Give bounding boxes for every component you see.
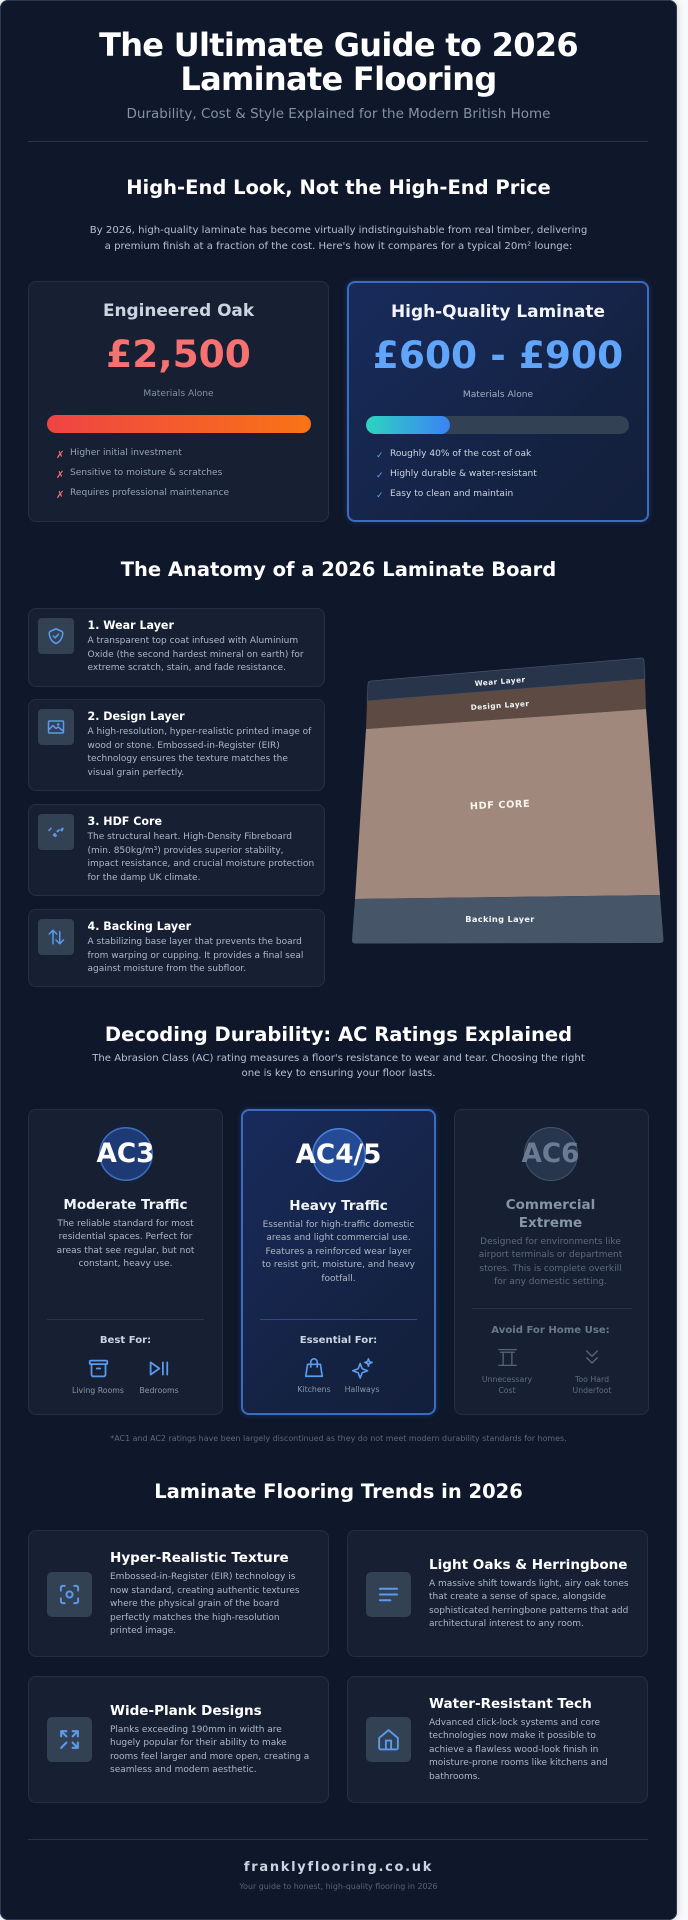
icon: sparkles [352, 1358, 373, 1379]
laminate benefits list: Roughly 40% of the cost of oak [390, 449, 531, 459]
laminate heading: High-Quality Laminate [391, 301, 605, 321]
ac4/5 description: to resist grit, moisture, and heavy [262, 1260, 415, 1270]
texture text: Hyper-Realistic Texture [110, 1550, 289, 1566]
water-resistant text: Water-Resistant Tech [429, 1696, 592, 1712]
ac6 title [506, 1197, 595, 1231]
oak drawbacks list: ✗ [56, 490, 64, 501]
ac4/5 badge [296, 1128, 381, 1182]
ac3 description: The reliable standard for most [57, 1218, 194, 1228]
oak cost bar [47, 415, 311, 433]
light oaks text [429, 1556, 629, 1629]
title: The Ultimate Guide to 2026 [99, 26, 578, 64]
intro paragraph: a premium finish at a fraction of the cost. Here's how it compares for a typical 20m² lounge: [105, 241, 572, 252]
heading: high-end look: High-End Look, Not the High-End Price [126, 176, 551, 199]
kitchens: Kitchens [297, 1385, 331, 1394]
icon: expand arrows [47, 1717, 92, 1762]
ac3 description: constant, heavy use. [79, 1259, 172, 1269]
oak drawbacks list [56, 448, 229, 501]
ac6 description: Designed for environments like [480, 1236, 621, 1246]
unnecessary cost: Cost [498, 1386, 516, 1395]
icon: columns [498, 1349, 517, 1366]
backing layer text: A stabilizing base layer that prevents the board [88, 937, 302, 947]
intro paragraph [90, 225, 587, 252]
laminate benefits list [376, 449, 537, 501]
heading: anatomy: The Anatomy of a 2026 Laminate Board [121, 558, 556, 581]
panel: hdf core [28, 804, 325, 896]
laminate price note: Materials Alone [463, 390, 533, 400]
design layer band [366, 679, 646, 729]
footer tagline: Your guide to honest, high-quality flooring in 2026 [239, 1882, 438, 1891]
laminate benefits list: ✓ [376, 451, 384, 461]
design layer text: wood or stone. Embossed-in-Register (EIR) [88, 741, 280, 751]
wear layer text: Oxide (the second hardest mineral on earth) for [88, 650, 304, 660]
ac4/5 description: Essential for high-traffic domestic [263, 1220, 414, 1230]
oak drawbacks list: Higher initial investment [70, 448, 182, 458]
water-resistant text: moisture-prone rooms like kitchens and [429, 1758, 608, 1768]
oak heading: Engineered Oak [103, 300, 254, 320]
ac4/5 description [262, 1220, 415, 1284]
ac4/5 title: Heavy Traffic [289, 1198, 388, 1214]
texture text [110, 1550, 300, 1636]
ac intro paragraph: one is key to ensuring your floor lasts. [242, 1068, 435, 1079]
hallways [345, 1358, 379, 1394]
ac3 badge: AC3 [97, 1139, 154, 1169]
living rooms [72, 1360, 124, 1395]
design layer text: technology ensures the texture matches the [88, 754, 288, 764]
texture text: perfectly matches the high-resolution [110, 1613, 280, 1623]
hdf core text: for the damp UK climate. [88, 873, 200, 883]
oak drawbacks list: Requires professional maintenance [70, 488, 229, 498]
oak drawbacks list: Sensitive to moisture & scratches [70, 468, 222, 478]
wide-plank text: seamless and modern aesthetic. [110, 1765, 257, 1775]
wear layer text [88, 619, 304, 673]
texture text: where the physical grain of the board [110, 1599, 279, 1609]
wide-plank text: hugely popular for their ability to make [110, 1738, 287, 1748]
bedrooms [139, 1362, 179, 1395]
laminate benefits list: ✓ [376, 491, 384, 501]
too hard underfoot: Too Hard [575, 1375, 609, 1384]
heading: decoding durability: Decoding Durability: AC Ratings Explained [105, 1023, 572, 1046]
light oaks text: that create a sense of space, alongside [429, 1592, 606, 1602]
texture text: now standard, creating authentic textures [110, 1586, 300, 1596]
backing layer text: against moisture from the subfloor. [88, 964, 246, 974]
ac6 description [479, 1236, 622, 1287]
hallways: Hallways [345, 1385, 379, 1394]
panel: light oaks [347, 1530, 648, 1657]
ac6 badge: AC6 [522, 1139, 579, 1169]
ac3 description: residential spaces. Perfect for [59, 1232, 192, 1242]
ac footnote: *AC1 and AC2 ratings have been largely discontinued as they do not meet modern durability standards for homes. [110, 1434, 567, 1443]
icon: scatter dots [38, 814, 74, 850]
panel: design layer [28, 699, 325, 791]
subtitle: Durability, Cost & Style Explained for the Modern British Home [127, 106, 550, 122]
intro paragraph: By 2026, high-quality laminate has become virtually indistinguishable from real timber, delivering [90, 225, 587, 236]
design layer text: visual grain perfectly. [88, 768, 184, 778]
ac3 description [57, 1218, 194, 1269]
ac intro paragraph [92, 1052, 585, 1079]
wide-plank text: Planks exceeding 190mm in width are [110, 1724, 282, 1734]
design layer band: Design Layer [470, 699, 530, 712]
wide-plank text [110, 1702, 309, 1775]
hdf core text [88, 815, 314, 883]
wear layer band: Wear Layer [474, 675, 526, 688]
hdf core text: The structural heart. High-Density Fibreboard [88, 832, 292, 842]
unnecessary cost: Unnecessary [482, 1375, 532, 1384]
wear layer text: 1. Wear Layer [88, 619, 174, 632]
ac3 best for label: Best For: [100, 1335, 151, 1346]
wear layer text: A transparent top coat infused with Aluminium [88, 636, 298, 646]
oak drawbacks list: ✗ [56, 450, 64, 461]
ac6 description: for any domestic setting. [494, 1277, 607, 1287]
backing layer text: 4. Backing Layer [88, 920, 191, 933]
ac4/5 description: Features a reinforced wear layer [266, 1247, 411, 1257]
panel: ac4/5 [241, 1109, 436, 1415]
icon: chevrons down [586, 1350, 598, 1364]
oak price note: Materials Alone [143, 389, 214, 399]
laminate cost bar [366, 416, 629, 434]
living rooms: Living Rooms [72, 1386, 124, 1395]
texture text: Embossed-in-Register (EIR) technology is [110, 1572, 295, 1582]
ac6 badge [522, 1127, 579, 1181]
ac4/5 description: areas and light commercial use. [266, 1233, 411, 1243]
panel: water-resistant tech [347, 1676, 648, 1803]
laminate price: £600 - £900 [373, 333, 623, 377]
icon: play pause [150, 1362, 168, 1376]
icon: house [366, 1717, 411, 1762]
laminate benefits list: Highly durable & water-resistant [390, 469, 537, 479]
backing layer text: from warping or cupping. It provides a final seal [88, 951, 303, 961]
icon: shield [38, 618, 74, 654]
ac6 description: airport terminals or department [479, 1250, 622, 1260]
water-resistant text: achieve a flawless wood-look finish in [429, 1745, 598, 1755]
icon: shopping bag [304, 1358, 324, 1378]
water-resistant text: technologies now make it possible to [429, 1731, 596, 1741]
design layer text: 2. Design Layer [88, 710, 185, 723]
ac6 title: Extreme [519, 1215, 582, 1231]
wear layer band [367, 658, 645, 701]
hdf core band: HDF CORE [470, 799, 530, 812]
ac6 avoid label: Avoid For Home Use: [491, 1325, 610, 1336]
title [99, 26, 578, 98]
water-resistant text: bathrooms. [429, 1772, 480, 1782]
water-resistant text [429, 1696, 608, 1782]
design layer text: A high-resolution, hyper-realistic printed image of [88, 727, 311, 737]
ac4/5 essential for label: Essential For: [300, 1335, 377, 1346]
backing layer band [352, 895, 664, 944]
icon: up down arrows [38, 919, 74, 955]
water-resistant text: Advanced click-lock systems and core [429, 1718, 600, 1728]
light oaks text: sophisticated herringbone patterns that add [429, 1606, 628, 1616]
panel: hyper-realistic texture [28, 1530, 329, 1657]
light oaks text: A massive shift towards light, airy oak tones [429, 1578, 629, 1588]
laminate benefits list: Easy to clean and maintain [390, 489, 513, 499]
oak drawbacks list: ✗ [56, 470, 64, 481]
ac3 title: Moderate Traffic [63, 1197, 188, 1213]
oak price: £2,500 [106, 332, 251, 376]
ac6 title: Commercial [506, 1197, 595, 1213]
hdf core band [355, 709, 660, 899]
backing layer text [88, 920, 303, 974]
icon: archive [88, 1360, 108, 1378]
ac3 badge [96, 1127, 154, 1181]
wide-plank text: rooms feel larger and more open, creating a [110, 1752, 309, 1762]
title: Laminate Flooring [180, 60, 497, 98]
hdf core text: 3. HDF Core [88, 815, 162, 828]
kitchens [297, 1358, 331, 1394]
light oaks text: Light Oaks & Herringbone [429, 1556, 628, 1572]
laminate benefits list: ✓ [376, 471, 384, 481]
panel: high-quality laminate [347, 281, 649, 522]
panel: ac6 [454, 1109, 649, 1415]
ac3 description: areas that see regular, but not [57, 1246, 194, 1256]
bedrooms: Bedrooms [139, 1386, 179, 1395]
backing layer band: Backing Layer [465, 914, 535, 924]
panel: ac3 [28, 1109, 223, 1415]
design layer text [88, 710, 312, 778]
heading: trends: Laminate Flooring Trends in 2026 [154, 1480, 523, 1503]
icon: align left [366, 1572, 411, 1617]
too hard underfoot [573, 1350, 612, 1395]
ac4/5 description: footfall. [321, 1274, 356, 1284]
unnecessary cost [482, 1349, 532, 1395]
wear layer text: extreme scratch, stain, and fade resistance. [88, 663, 286, 673]
icon: image [38, 709, 74, 745]
wide-plank text: Wide-Plank Designs [110, 1702, 262, 1718]
panel: engineered oak [28, 281, 329, 522]
hdf core text: impact resistance, and crucial moisture protection [88, 859, 314, 869]
chart: laminate board cross-section [352, 658, 664, 944]
icon: scan [47, 1572, 92, 1617]
ac intro paragraph: The Abrasion Class (AC) rating measures a floor's resistance to wear and tear. Choosing the right [92, 1052, 585, 1064]
panel: backing layer [28, 909, 325, 987]
panel: wear layer [28, 608, 325, 687]
ac6 description: stores. This is complete overkill [479, 1264, 622, 1274]
texture text: printed image. [110, 1626, 176, 1636]
footer brand: franklyflooring.co.uk [244, 1860, 433, 1875]
light oaks text: architectural interest to any room. [429, 1619, 584, 1629]
panel: wide-plank designs [28, 1676, 329, 1803]
ac4/5 badge: AC4/5 [296, 1140, 381, 1170]
too hard underfoot: Underfoot [573, 1386, 611, 1395]
hdf core text: (min. 850kg/m³) provides superior stability, [88, 846, 284, 856]
